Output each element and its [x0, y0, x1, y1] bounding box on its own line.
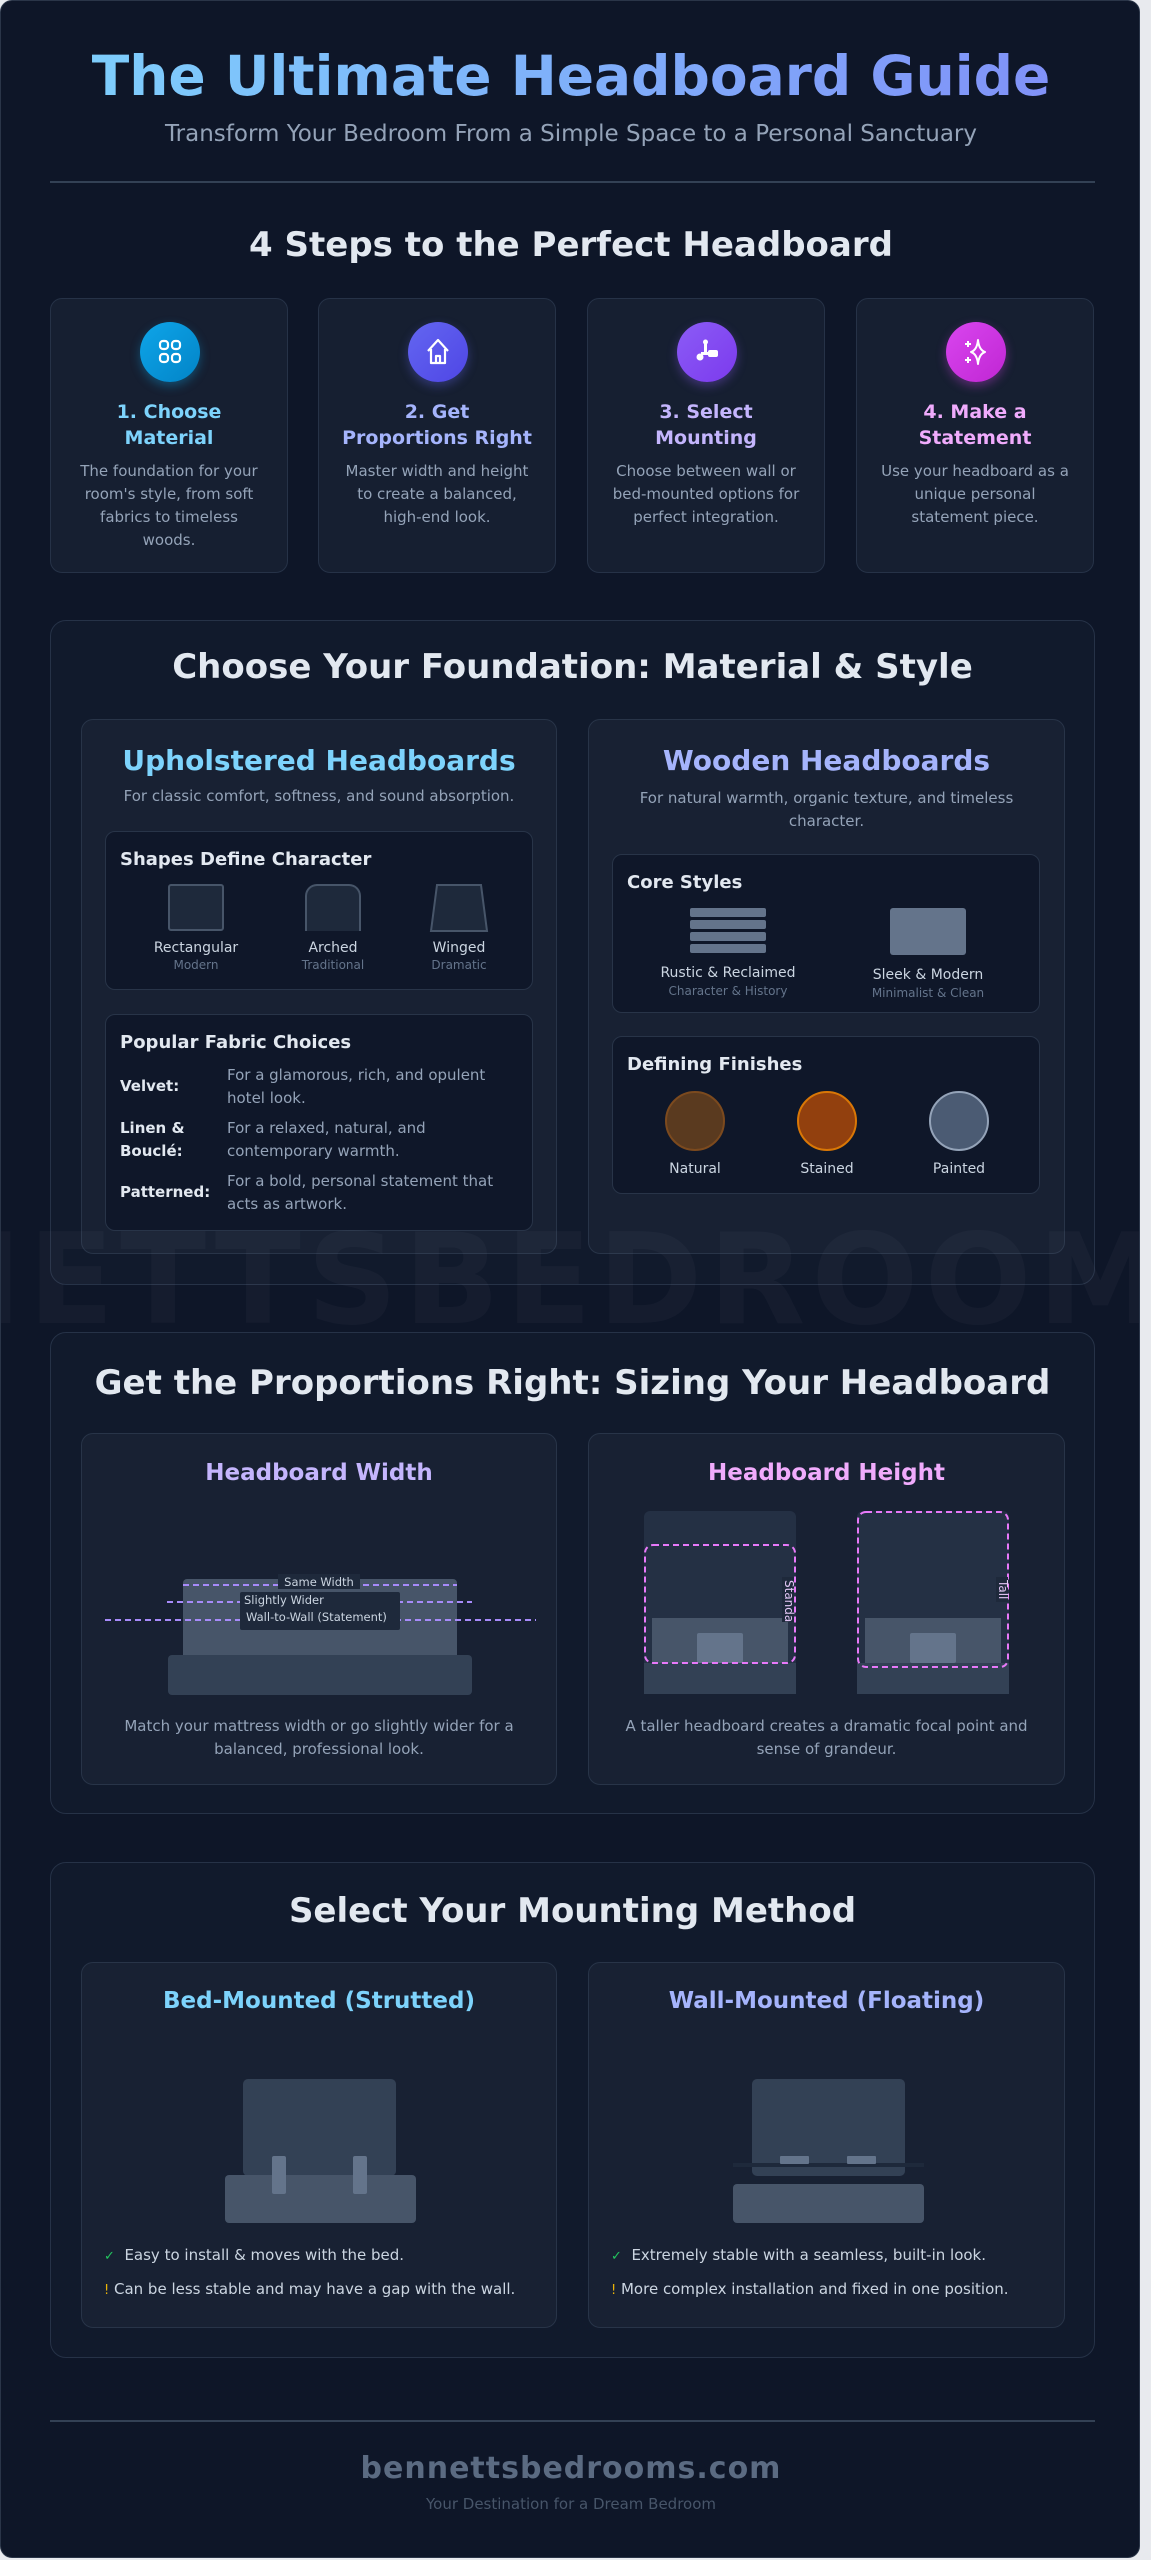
panel: mounting: [50, 1862, 1095, 2358]
shape: rectangular: [154, 884, 238, 972]
footer: bennettsbedrooms.com: [361, 2451, 781, 2486]
panel: width: Headboard Width: [205, 1460, 433, 1486]
subtitle: For classic comfort, softness, and sound absorption.: [124, 787, 514, 805]
panel: height: A taller headboard creates a dramatic focal point and sense of grandeur.: [625, 1717, 1028, 1758]
step title: [919, 401, 1032, 449]
height diagram: Tall: [996, 1579, 1010, 1599]
panel: bed-mounted: ! Can be less stable and may have a gap with the wall.: [104, 2280, 515, 2298]
panel: proportions: [50, 1332, 1095, 1814]
subtitle: For natural warmth, organic texture, and timeless character.: [640, 789, 1013, 830]
panel: width: [81, 1433, 557, 1785]
box: core styles: [612, 854, 1040, 1013]
style: sleek: Sleek & Modern: [873, 967, 983, 983]
panel: height: Headboard Height: [708, 1460, 945, 1486]
fabric: linen: [120, 1119, 426, 1160]
heading: Choose Your Foundation: Material & Style: [172, 647, 973, 687]
width diagram: Wall-to-Wall (Statement): [246, 1610, 387, 1624]
finish: painted: Painted: [933, 1161, 985, 1177]
fabric: velvet: For a glamorous, rich, and opulent hotel look.: [227, 1066, 485, 1107]
width diagram: Slightly Wider: [244, 1593, 324, 1607]
wall-mounted diagram: [733, 2079, 924, 2223]
box: fabrics: Popular Fabric Choices: [120, 1032, 351, 1053]
title: The Ultimate Headboard Guide: [92, 44, 1050, 108]
fabric: linen: For a relaxed, natural, and contemporary warmth.: [227, 1119, 426, 1160]
style: rustic: Rustic & Reclaimed: [660, 965, 796, 981]
panel: wall-mounted: Wall-Mounted (Floating): [669, 1988, 984, 2014]
shape: rectangular: Rectangular: [154, 940, 238, 956]
heading: 4 steps: 4 Steps to the Perfect Headboard: [249, 225, 893, 265]
shape: arched: Arched: [308, 940, 358, 956]
box: finishes: [612, 1036, 1040, 1194]
step title: [117, 401, 221, 449]
box: shapes: [105, 831, 533, 990]
fabric: patterned: Patterned:: [120, 1183, 210, 1201]
footer: Your Destination for a Dream Bedroom: [426, 2495, 716, 2513]
step text: The foundation for your room's style, from soft fabrics to timeless woods.: [80, 462, 258, 549]
shape: arched: Traditional: [302, 958, 364, 972]
style: sleek: Minimalist & Clean: [872, 986, 984, 1000]
box: finishes: Defining Finishes: [627, 1054, 802, 1075]
heading: Select Your Mounting Method: [289, 1891, 856, 1931]
step title: 4. Make a: [923, 401, 1027, 423]
step title: Material: [125, 427, 213, 449]
step title: [655, 401, 757, 449]
finish: painted: [929, 1091, 989, 1177]
bed-mounted diagram: [225, 2079, 416, 2223]
width diagram: [105, 1575, 536, 1695]
heading: Upholstered Headboards: [122, 744, 516, 777]
box: core styles: Core Styles: [627, 872, 742, 893]
finish: natural: [665, 1091, 725, 1177]
step card 2: [318, 298, 556, 573]
panel: upholstered: [81, 719, 557, 1254]
fabric: velvet: Velvet:: [120, 1077, 179, 1095]
step card 3: [587, 298, 825, 573]
step title: 2. Get: [405, 401, 469, 423]
step title: [342, 401, 532, 449]
step title: 3. Select: [659, 401, 753, 423]
step title: 1. Choose: [117, 401, 221, 423]
step text: Use your headboard as a unique personal statement piece.: [881, 462, 1069, 526]
pros/cons: ✓ Easy to install & moves with the bed.: [104, 2246, 404, 2264]
panel: material & style: [50, 620, 1095, 1285]
style: sleek: [872, 908, 984, 1000]
panel: height: [588, 1433, 1065, 1785]
icon: grid: [140, 322, 200, 382]
height diagram: Standa: [782, 1580, 796, 1622]
icon: house: [408, 322, 468, 382]
pros/cons: ✓ Extremely stable with a seamless, built-in look.: [611, 2246, 986, 2264]
step card 4: [856, 298, 1094, 573]
shape: winged: Winged: [433, 940, 485, 956]
box: shapes: Shapes Define Character: [120, 849, 371, 870]
icon: tools: [677, 322, 737, 382]
panel: wall-mounted: ! More complex installation and fixed in one position.: [611, 2280, 1009, 2298]
icon: sparkle: [946, 322, 1006, 382]
width diagram: Same Width: [284, 1575, 354, 1589]
fabric: linen: Bouclé:: [120, 1142, 183, 1160]
step title: Proportions Right: [342, 427, 532, 449]
shape: winged: [430, 884, 488, 972]
panel: wall-mounted: [588, 1962, 1065, 2328]
box: fabrics: [105, 1014, 533, 1231]
panel: bed-mounted: [81, 1962, 557, 2328]
style: rustic: Character & History: [669, 984, 787, 998]
shape: winged: Dramatic: [431, 958, 487, 972]
panel: bed-mounted: Bed-Mounted (Strutted): [163, 1988, 475, 2014]
subtitle: Transform Your Bedroom From a Simple Space to a Personal Sanctuary: [165, 121, 977, 147]
shape: arched: [302, 884, 364, 972]
step text: Choose between wall or bed-mounted options for perfect integration.: [613, 462, 799, 526]
panel: wooden: [588, 719, 1065, 1254]
finish: stained: [797, 1091, 857, 1177]
style: rustic: [660, 908, 796, 998]
finish: natural: Natural: [669, 1161, 721, 1177]
step title: Statement: [919, 427, 1031, 449]
step title: Mounting: [655, 427, 757, 449]
height diagram: [644, 1511, 1010, 1694]
footer: [361, 2451, 781, 2513]
finish: stained: Stained: [800, 1161, 854, 1177]
heading: Get the Proportions Right: Sizing Your Headboard: [95, 1363, 1050, 1403]
heading: Wooden Headboards: [663, 744, 990, 777]
fabric: linen: Linen &: [120, 1119, 185, 1137]
shape: rectangular: Modern: [173, 958, 219, 972]
step card 1: [50, 298, 288, 573]
step text: Master width and height to create a balanced, high-end look.: [346, 462, 528, 526]
panel: width: Match your mattress width or go slightly wider for a balanced, professional look.: [124, 1717, 514, 1758]
fabric: patterned: For a bold, personal statement that acts as artwork.: [227, 1172, 493, 1213]
